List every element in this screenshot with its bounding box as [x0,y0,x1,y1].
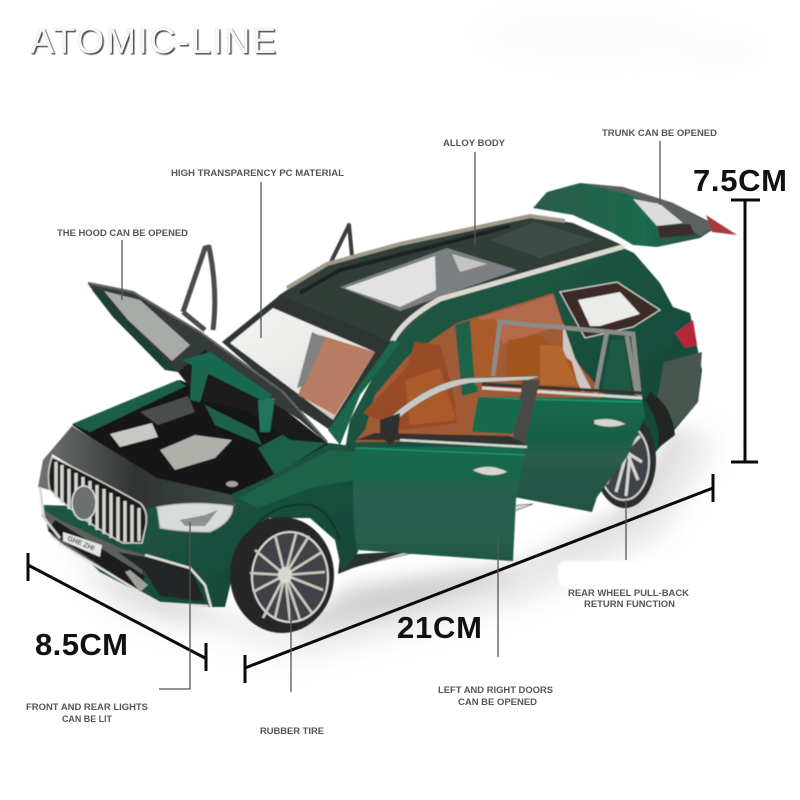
headlight [157,503,233,532]
rear pale interior glass [563,323,592,392]
callout: hood: THE HOOD CAN BE OPENED [57,228,189,238]
rear door handle [594,419,626,427]
rear lower grey panel [655,352,702,447]
callout: trunk: TRUNK CAN BE OPENED [602,128,718,138]
model car [38,183,737,633]
brand title: ATOMIC-LINE: ATOMIC-LINE [30,20,276,61]
roof [278,216,622,342]
grille [48,457,146,543]
number plate with text: GHE ZHI [66,535,95,553]
front fender and bumper [42,443,358,607]
sunroof glass [340,248,517,311]
door mirror [380,413,400,445]
callout: alloy body: ALLOY BODY [443,138,505,148]
callout: lights: CAN BE LIT [62,714,112,724]
rear door [478,384,645,512]
callout: doors: LEFT AND RIGHT DOORS [438,685,553,695]
callout: rear wheel pull-back: REAR WHEEL PULL-BACK [568,588,690,598]
ground shadow [60,430,715,655]
front door [353,376,542,561]
chrome roof rail [393,247,622,340]
front wheel [230,517,334,633]
lower bumper [40,487,211,607]
callout: lights: FRONT AND REAR LIGHTS [26,702,148,712]
front emblem [72,486,96,520]
nose panel above grille [38,426,235,510]
dimension: 7.5CM height [693,163,787,462]
green panel through rear door [602,340,632,392]
under-hood cavity [178,343,327,443]
callout: rubber tire [260,612,324,736]
engine details [72,380,328,487]
cabin interior opening [355,293,605,442]
open hood [88,283,327,443]
B pillar [455,320,478,396]
A pillar [328,340,400,445]
engine bay base [72,380,358,497]
brand title: ATOMIC-LINE: ATOMIC-LINE [32,22,278,62]
roof upper rail [287,216,565,288]
dimension: 7.5CM height: 7.5CM [693,163,787,198]
rear quarter window [560,282,660,338]
callout: rear wheel pull-back [568,500,690,609]
callout: hood [57,228,189,300]
rear roof section [490,222,595,258]
callout: doors [438,537,553,707]
callout: rubber tire: RUBBER TIRE [260,726,324,736]
tail light [675,320,697,348]
dimension: 8.5CM width [28,553,206,671]
running board [353,504,533,567]
white patch behind rear wheel label [558,561,698,586]
fender highlight [238,450,355,508]
callout: alloy body [443,138,505,245]
windshield [222,295,392,430]
callout: doors: CAN BE OPENED [458,697,538,707]
door handle [472,466,508,476]
interior light wall [478,295,563,345]
front seats [363,342,457,430]
rear door window frame [493,322,640,400]
rear wheel [594,412,656,508]
rear wheel arch [645,392,675,448]
callout: rear wheel pull-back: RETURN FUNCTION [584,599,675,609]
far door frame above the roof [331,225,352,262]
rear side door frame behind the hood [183,247,215,330]
green inner panel [472,397,523,434]
rear body shell [345,248,702,470]
callout: trunk [602,128,718,205]
dimension: 21CM length [245,474,713,683]
dimension: 8.5CM width: 8.5CM [35,627,128,662]
faint background smudges [480,13,760,66]
rear seats [470,318,578,385]
callout: PC material: HIGH TRANSPARENCY PC MATERIAL [171,168,345,178]
raised trunk lid [533,183,737,247]
callout: lights [26,522,190,724]
dimension: 21CM length: 21CM [397,610,482,645]
number plate with text [63,532,102,557]
